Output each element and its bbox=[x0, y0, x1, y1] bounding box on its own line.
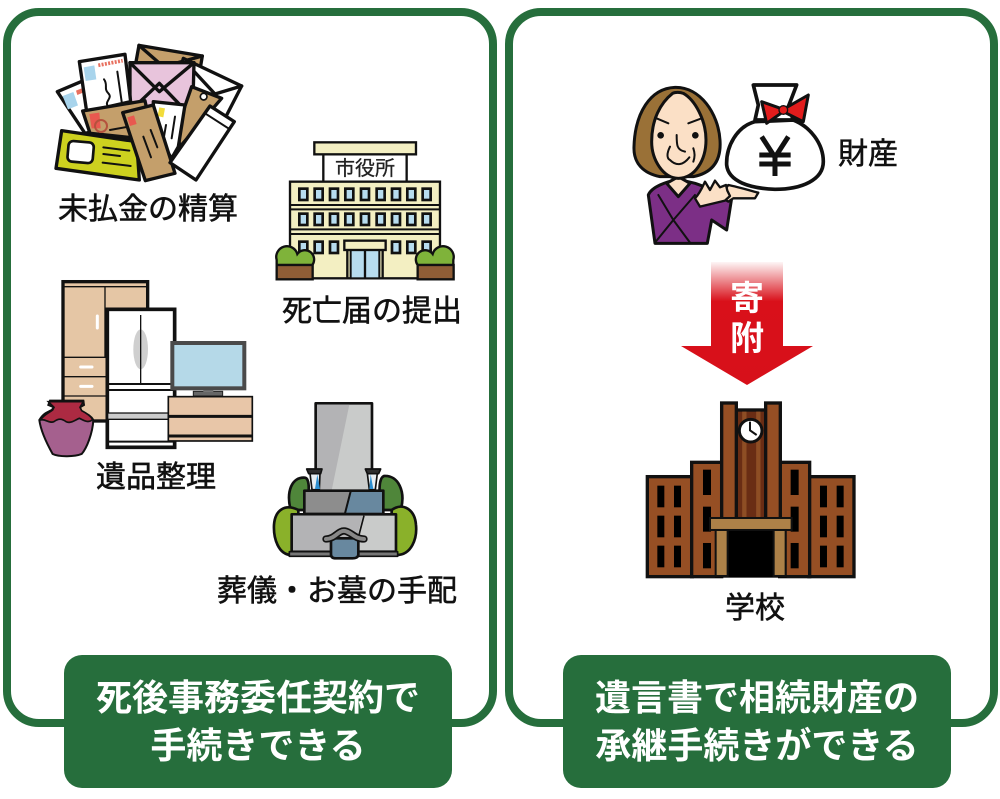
callout: right: 遺言書で相続財産の bbox=[595, 677, 919, 718]
label: death notice: 死亡届の提出 bbox=[282, 295, 462, 328]
label: school: 学校 bbox=[725, 592, 785, 625]
label: unpaid bills: 未払金の精算 bbox=[58, 193, 238, 226]
icon: city hall bbox=[276, 142, 454, 279]
callout: right: 承継手続きができる bbox=[595, 725, 919, 766]
arrow: donation bbox=[681, 262, 813, 385]
callout: left: 手続きできる bbox=[150, 725, 366, 766]
panel: right bbox=[509, 12, 994, 723]
callout: left bbox=[64, 655, 452, 788]
panel: left bbox=[7, 12, 493, 723]
arrow: donation: 附 bbox=[730, 320, 764, 358]
arrow label: 寄 bbox=[730, 280, 764, 318]
callout: left: 死後事務委任契約で bbox=[96, 677, 420, 718]
icon: furniture bbox=[39, 282, 252, 456]
label: funeral and grave: 葬儀・お墓の手配 bbox=[217, 575, 457, 608]
icon: pile of mail bbox=[56, 45, 242, 181]
icon: grave bbox=[274, 403, 416, 558]
icon: woman with money bag bbox=[634, 85, 823, 243]
callout: right bbox=[563, 655, 951, 788]
label: estate clearing: 遺品整理 bbox=[96, 461, 216, 494]
label: city hall sign: 市役所 bbox=[335, 157, 395, 180]
icon: school bbox=[647, 403, 854, 578]
label: assets: 財産 bbox=[838, 138, 898, 171]
